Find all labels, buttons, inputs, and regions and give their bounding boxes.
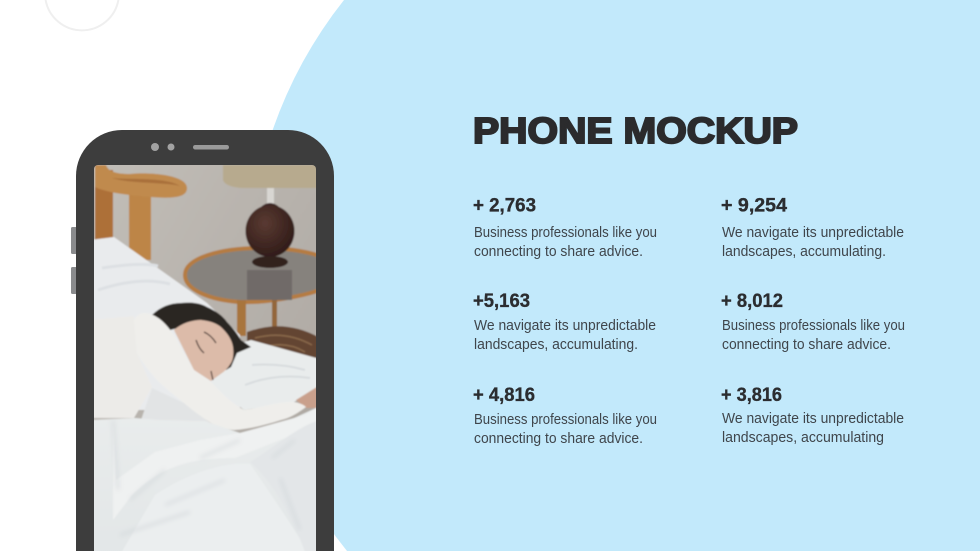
stat: + 3,816: landscapes, accumulating — [722, 429, 884, 446]
photo: woman sleeping in bed — [90, 160, 320, 551]
stat: +5,163 — [473, 290, 656, 353]
stat: + 2,763: + 2,763 — [473, 194, 536, 216]
bed mattress — [90, 237, 240, 410]
stat: + 8,012: connecting to share advice. — [722, 336, 891, 353]
stat: + 3,816 — [721, 384, 904, 446]
sleeve arm — [134, 313, 306, 430]
phone body — [76, 130, 334, 551]
camera dots — [151, 143, 174, 151]
stat: + 2,763: Business professionals like you — [474, 224, 657, 241]
glass side table — [185, 248, 320, 362]
hand — [296, 386, 316, 408]
phone mockup — [71, 130, 334, 551]
decorative circle outline — [46, 0, 118, 30]
shadow under arm — [141, 410, 210, 423]
stat: + 8,012: Business professionals like you — [722, 317, 905, 334]
wooden chair — [95, 165, 187, 260]
blue background shape — [249, 0, 980, 551]
closed eye, brow and mouth — [196, 332, 216, 380]
stat: + 4,816: connecting to share advice. — [474, 430, 643, 447]
stat: + 3,816: + 3,816 — [721, 384, 782, 406]
stat: + 9,254 — [721, 194, 904, 260]
stat: + 9,254: landscapes, accumulating. — [722, 243, 886, 260]
stat: + 2,763 — [473, 194, 657, 260]
pillow — [239, 338, 316, 410]
stat: + 8,012: + 8,012 — [721, 290, 783, 312]
side buttons — [71, 227, 77, 294]
stat: + 4,816: + 4,816 — [473, 384, 535, 406]
stat: + 8,012 — [721, 290, 905, 353]
title: PHONE MOCKUP — [473, 110, 798, 151]
stat: + 3,816: We navigate its unpredictable — [722, 410, 904, 427]
stat: + 9,254: We navigate its unpredictable — [722, 224, 904, 241]
stat: + 2,763: connecting to share advice. — [474, 243, 643, 260]
speaker — [193, 145, 229, 150]
blanket — [90, 406, 320, 551]
hair — [152, 303, 251, 370]
torso — [94, 409, 139, 419]
stat: +5,163: We navigate its unpredictable — [474, 317, 656, 334]
face — [174, 320, 233, 381]
stat: +5,163: +5,163 — [473, 290, 530, 312]
lamp — [223, 165, 320, 268]
stat: + 4,816: Business professionals like you — [474, 411, 657, 428]
stat: + 9,254: + 9,254 — [721, 194, 787, 216]
stat: +5,163: landscapes, accumulating. — [474, 336, 638, 353]
stat: + 4,816 — [473, 384, 657, 447]
